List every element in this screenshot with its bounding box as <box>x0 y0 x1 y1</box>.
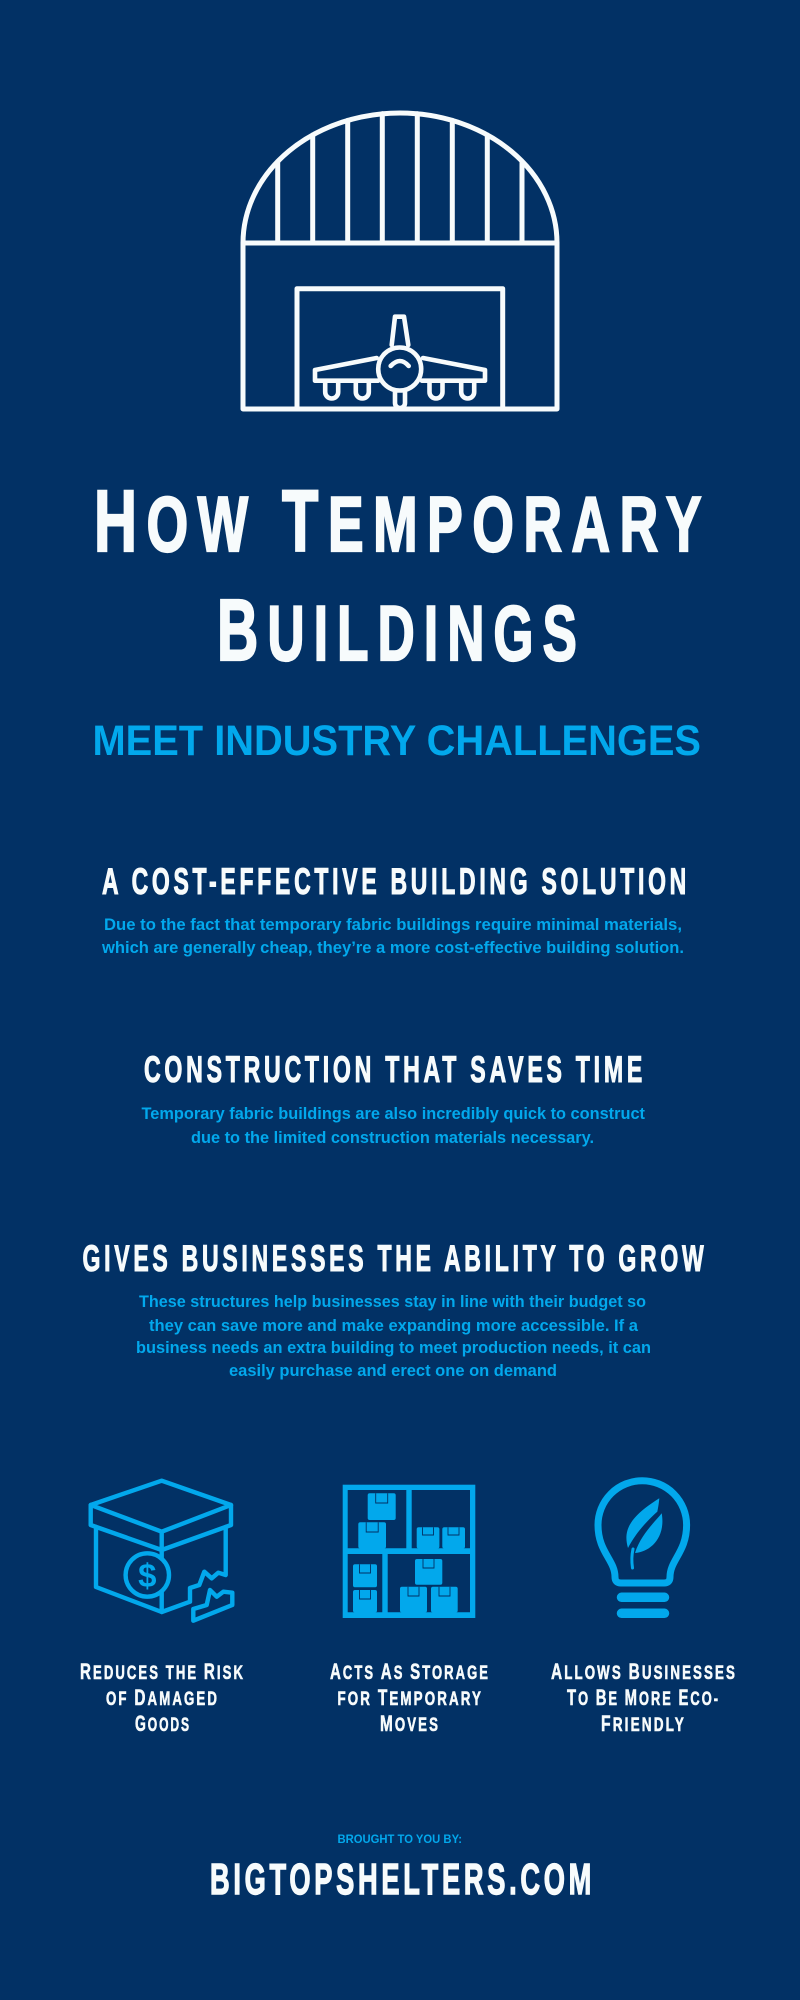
label: eco-friendly: TO BE MORE ECO- <box>567 1685 720 1710</box>
section: saves time <box>142 1049 646 1147</box>
body text <box>142 1104 645 1147</box>
attribution label: BROUGHT TO YOU BY: <box>338 1834 462 1846</box>
title: BUILDINGS <box>217 582 586 679</box>
icon: damaged box with dollar <box>91 1481 232 1621</box>
label: eco-friendly <box>551 1659 737 1736</box>
body text <box>136 1292 651 1380</box>
body text: business needs an extra building to meet production needs, it can <box>136 1338 651 1357</box>
title <box>94 473 711 679</box>
label: acts as storage <box>330 1659 490 1736</box>
body text: due to the limited construction materials necessary. <box>191 1128 594 1147</box>
section: cost-effective solution <box>101 861 690 957</box>
body text: Due to the fact that temporary fabric buildings require minimal materials, <box>104 915 682 934</box>
label: reduces the risk: OF DAMAGED <box>106 1685 219 1710</box>
label: acts as storage: FOR TEMPORARY <box>338 1685 483 1710</box>
body text: easily purchase and erect one on demand <box>229 1361 557 1380</box>
body text: These structures help businesses stay in line with their budget so <box>139 1292 646 1311</box>
subtitle: MEET INDUSTRY CHALLENGES <box>92 717 701 765</box>
label: reduces the risk: REDUCES THE RISK <box>80 1659 245 1684</box>
body text: Temporary fabric buildings are also incredibly quick to construct <box>142 1104 645 1123</box>
icon: storage shelves with boxes <box>343 1485 475 1618</box>
icon: light bulb with leaf <box>598 1481 687 1613</box>
body text: which are generally cheap, they’re a more cost-effective building solution. <box>101 938 684 957</box>
label: eco-friendly: FRIENDLY <box>601 1711 686 1736</box>
label: acts as storage: MOVES <box>380 1711 440 1736</box>
icon: hangar with airplane <box>243 113 557 409</box>
label: acts as storage: ACTS AS STORAGE <box>330 1659 490 1684</box>
label: eco-friendly: ALLOWS BUSINESSES <box>551 1659 737 1684</box>
body text: they can save more and make expanding more accessible. If a <box>149 1316 639 1335</box>
label: reduces the risk: GOODS <box>135 1711 191 1736</box>
icon: damaged box with dollar: $ <box>138 1557 156 1594</box>
body text <box>101 915 684 957</box>
section: ability to grow <box>82 1238 708 1380</box>
label: reduces the risk <box>80 1659 245 1736</box>
